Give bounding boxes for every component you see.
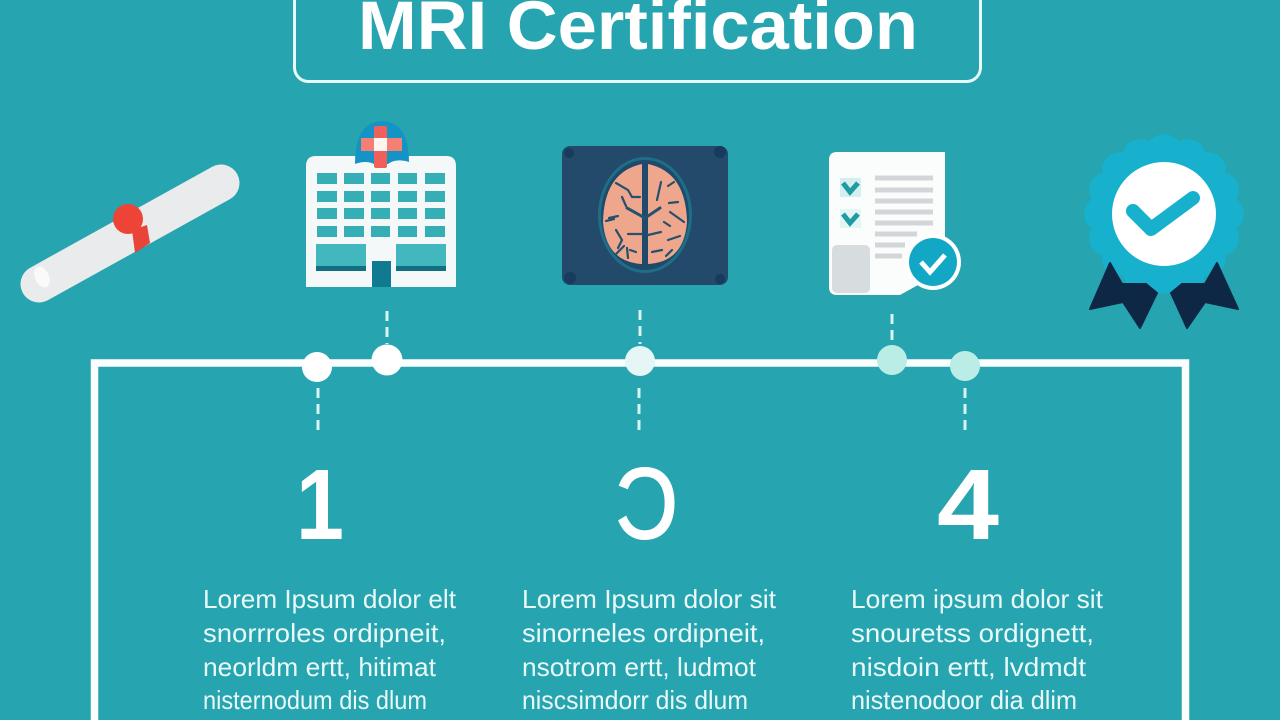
document badge xyxy=(905,234,961,290)
seal xyxy=(1084,134,1244,294)
timeline frame xyxy=(94,363,1186,720)
timeline nodes xyxy=(302,344,980,382)
text block: step 4: snouretss ordignett, xyxy=(851,618,1094,648)
title box xyxy=(294,0,980,82)
gray stamp xyxy=(832,245,870,293)
text block: step 2: Lorem Ipsum dolor sit xyxy=(522,584,777,614)
step number 4: 4 xyxy=(937,449,999,561)
icon: brain scan xyxy=(562,146,728,285)
text block: step 4 xyxy=(851,584,1104,715)
title frame xyxy=(294,0,980,82)
check marks xyxy=(840,178,861,228)
dashed connectors xyxy=(318,310,965,430)
hospital cross dome xyxy=(355,121,409,168)
document text lines xyxy=(875,178,933,256)
text block: step 1: snorrroles ordipneit, xyxy=(203,618,446,648)
text block: step 4: Lorem ipsum dolor sit xyxy=(851,584,1104,614)
text block: step 2: sinorneles ordipneit, xyxy=(522,618,765,648)
brain hemispheres xyxy=(603,164,642,264)
text block: step 2: niscsimdorr dis dlum xyxy=(522,685,748,715)
seal check mark xyxy=(1133,198,1193,229)
brain fissures xyxy=(606,182,684,258)
text block: step 1: Lorem Ipsum dolor elt xyxy=(203,584,457,614)
text block: step 4: nisdoin ertt, lvdmdt xyxy=(851,652,1087,682)
hospital lower windows xyxy=(316,244,446,271)
step number 1: 1 xyxy=(296,449,344,561)
text block: step 2 xyxy=(522,584,777,715)
text block: step 2: nsotrom ertt, ludmot xyxy=(522,652,757,682)
ribbons xyxy=(1090,263,1238,328)
icon: diploma scroll xyxy=(31,183,221,290)
icon: checklist document xyxy=(829,152,961,295)
text block: step 1 xyxy=(203,584,457,715)
icon: award rosette xyxy=(1084,134,1244,328)
icon: hospital xyxy=(306,121,456,287)
text block: step 1: nisternodum dis dlum xyxy=(203,685,427,715)
hospital windows xyxy=(317,173,445,237)
hospital door xyxy=(372,261,391,287)
step number 2: C xyxy=(616,448,678,560)
text block: step 1: neorldm ertt, hitimat xyxy=(203,652,437,682)
text block: step 4: nistenodoor dia dlim xyxy=(851,685,1077,715)
